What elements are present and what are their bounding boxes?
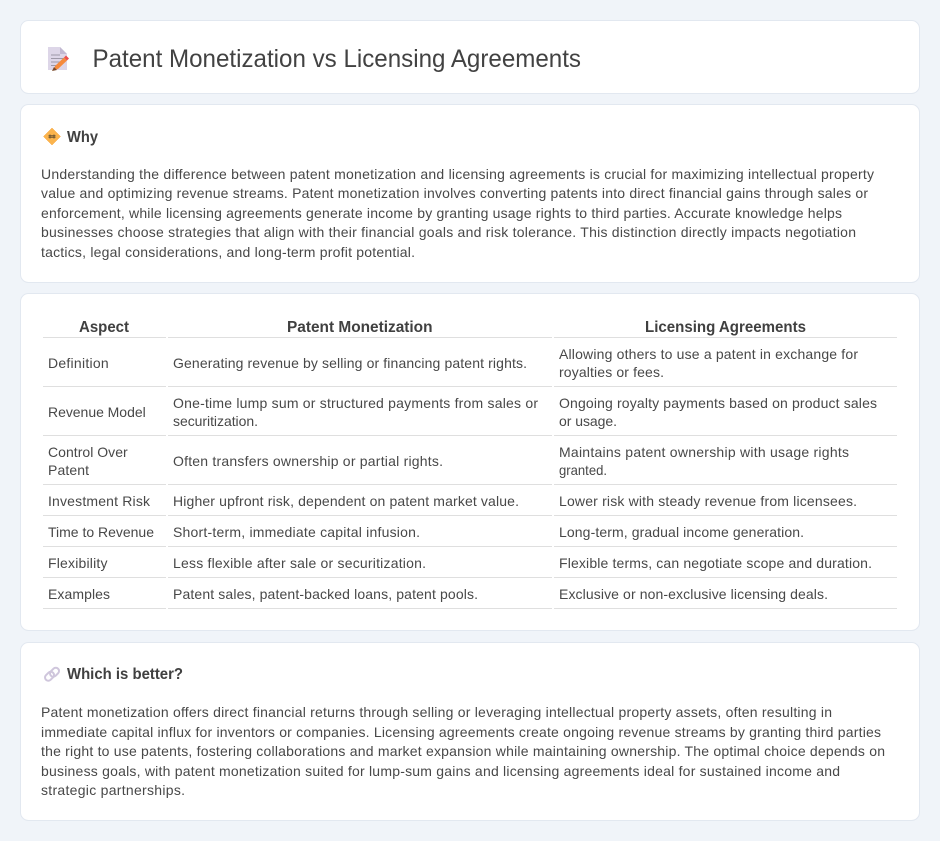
row: time to revenue: Short-term, immediate capital infusion. [173, 524, 420, 540]
panel: which is better [20, 642, 920, 820]
table header [43, 319, 897, 338]
row: control over patent: granted. [559, 462, 607, 478]
row: revenue model: or usage. [559, 413, 617, 429]
row: revenue model: One-time lump sum or structured payments from sales or [173, 395, 538, 411]
row: investment risk: Investment Risk [48, 493, 151, 509]
row: control over patent: Control Over [48, 444, 128, 460]
row: time to revenue [43, 524, 897, 547]
which is better paragraph: immediate capital influx for inventors or companies. Licensing agreements create ongoing revenue streams by granting third parties [41, 724, 881, 740]
heading: why: Why [67, 129, 98, 146]
why paragraph: businesses choose strategies that align with their financial goals and risk tolerance. This distinction directly impacts negotiation [41, 224, 856, 240]
heading: which is better: Which is better? [67, 666, 183, 683]
table header: Patent Monetization [287, 319, 432, 336]
row: revenue model: Revenue Model [48, 404, 146, 420]
row: examples [43, 586, 897, 609]
row: control over patent: Patent [48, 462, 89, 478]
row: control over patent [43, 444, 897, 485]
why paragraph [41, 166, 874, 260]
row: examples: Patent sales, patent-backed loans, patent pools. [173, 586, 478, 602]
panel: title card [20, 20, 920, 94]
row: control over patent: Often transfers ownership or partial rights. [173, 453, 443, 469]
row: flexibility [43, 555, 897, 578]
row: investment risk: Higher upfront risk, dependent on patent market value. [173, 493, 519, 509]
row: revenue model: Ongoing royalty payments based on product sales [559, 395, 877, 411]
row: investment risk: Lower risk with steady revenue from licensees. [559, 493, 857, 509]
row: definition: Definition [48, 355, 109, 371]
title: Patent Monetization vs Licensing Agreements [92, 45, 581, 73]
why paragraph: Understanding the difference between patent monetization and licensing agreements is crucial for maximizing intellectual property [41, 166, 874, 182]
row: revenue model: securitization. [173, 413, 258, 429]
table header: Licensing Agreements [645, 319, 806, 336]
row: time to revenue: Long-term, gradual income generation. [559, 524, 804, 540]
row: investment risk [43, 493, 897, 516]
row: definition: Allowing others to use a patent in exchange for [559, 346, 858, 362]
row: control over patent: Maintains patent ownership with usage rights [559, 444, 849, 460]
panel: why [20, 104, 920, 282]
why paragraph: value and optimizing revenue streams. Patent monetization involves converting patents into direct financial gains through sales or [41, 185, 868, 201]
table header: Aspect [79, 319, 130, 336]
why paragraph: tactics, legal considerations, and long-term profit potential. [41, 244, 415, 260]
which is better paragraph: strategic partnerships. [41, 782, 185, 798]
row: revenue model [43, 395, 897, 436]
which is better paragraph [41, 704, 885, 798]
row: definition [43, 346, 897, 387]
row: examples: Examples [48, 586, 110, 602]
row: flexibility: Flexible terms, can negotiate scope and duration. [559, 555, 872, 571]
which is better paragraph: business goals, with patent monetization suited for lump-sum gains and licensing agreements ideal for sustained income and [41, 763, 840, 779]
icon: document with pencil [48, 47, 69, 71]
row: flexibility: Less flexible after sale or securitization. [173, 555, 426, 571]
row: examples: Exclusive or non-exclusive licensing deals. [559, 586, 828, 602]
row: definition: royalties or fees. [559, 364, 664, 380]
which is better paragraph: Patent monetization offers direct financial returns through selling or leveraging intellectual property assets, often resulting in [41, 704, 832, 720]
row: flexibility: Flexibility [48, 555, 108, 571]
why paragraph: enforcement, while licensing agreements generate income by granting usage rights to third parties. Accurate knowledge helps [41, 205, 842, 221]
which is better paragraph: the right to use patents, fostering collaborations and market expansion while maintaining ownership. The optimal choice depends on [41, 743, 885, 759]
panel: comparison table [20, 294, 920, 630]
icon: orange diamond [44, 128, 60, 145]
icon: chain link [44, 666, 60, 682]
row: definition: Generating revenue by selling or financing patent rights. [173, 355, 527, 371]
row: time to revenue: Time to Revenue [48, 524, 154, 540]
